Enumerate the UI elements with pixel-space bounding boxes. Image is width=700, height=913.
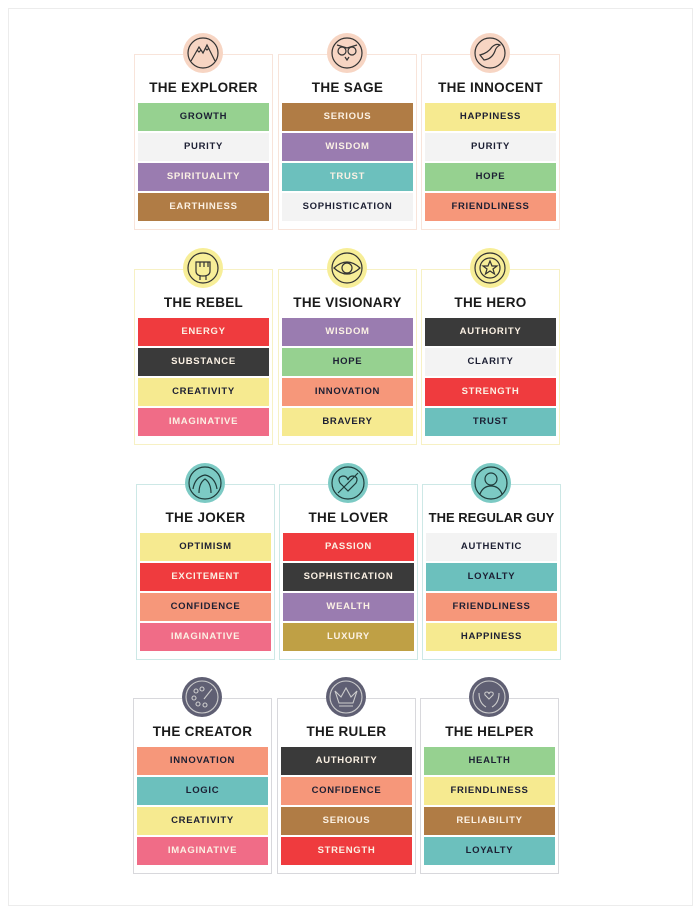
title: THE EXPLORER	[149, 80, 258, 95]
card: the ruler	[277, 698, 416, 874]
trait bars: SUBSTANCE	[171, 356, 236, 367]
title: THE REBEL	[164, 295, 243, 310]
trait bars: SERIOUS	[324, 111, 371, 122]
icon: dove	[470, 33, 510, 73]
trait bars	[140, 533, 271, 651]
trait bars: HOPE	[333, 356, 362, 367]
trait bars: INNOVATION	[315, 386, 380, 397]
trait bars: LOYALTY	[466, 845, 513, 856]
trait bars: IMAGINATIVE	[171, 631, 240, 642]
trait bars	[137, 747, 268, 865]
trait bars: STRENGTH	[462, 386, 519, 397]
trait bars: TRUST	[330, 171, 365, 182]
title: THE LOVER	[309, 510, 388, 525]
trait bars: WISDOM	[325, 141, 370, 152]
card: the hero	[421, 269, 560, 445]
icon: fist	[183, 248, 223, 288]
title: THE REGULAR GUY	[429, 510, 554, 525]
icon: crown	[326, 677, 366, 717]
card: the rebel	[134, 269, 273, 445]
trait bars	[138, 103, 269, 221]
icon: eye	[327, 248, 367, 288]
trait bars: RELIABILITY	[456, 815, 523, 826]
trait bars: BRAVERY	[322, 416, 373, 427]
trait bars	[425, 103, 556, 221]
trait bars: SPIRITUALITY	[167, 171, 240, 182]
trait bars: STRENGTH	[318, 845, 375, 856]
card: the helper	[420, 698, 559, 874]
trait bars: AUTHORITY	[460, 326, 521, 337]
title: THE RULER	[307, 724, 386, 739]
icon: person	[471, 463, 511, 503]
icon: owl	[327, 33, 367, 73]
trait bars	[138, 318, 269, 436]
trait bars: EXCITEMENT	[171, 571, 240, 582]
trait bars: HOPE	[476, 171, 505, 182]
trait bars: LOYALTY	[468, 571, 515, 582]
icon: star badge	[470, 248, 510, 288]
trait bars: CONFIDENCE	[171, 601, 240, 612]
trait bars: LOGIC	[186, 785, 219, 796]
trait bars: PURITY	[184, 141, 223, 152]
trait bars: AUTHENTIC	[461, 541, 522, 552]
title: THE HERO	[454, 295, 527, 310]
icon: palette	[182, 677, 222, 717]
trait bars: CREATIVITY	[172, 386, 235, 397]
trait bars: EARTHINESS	[169, 201, 238, 212]
icon: jester	[185, 463, 225, 503]
card: the regular guy	[422, 484, 561, 660]
card: the explorer	[134, 54, 273, 230]
trait bars: OPTIMISM	[179, 541, 232, 552]
trait bars: WEALTH	[326, 601, 371, 612]
trait bars	[424, 747, 555, 865]
trait bars: LUXURY	[327, 631, 370, 642]
trait bars: AUTHORITY	[316, 755, 377, 766]
trait bars: SOPHISTICATION	[303, 201, 392, 212]
title: THE HELPER	[445, 724, 534, 739]
trait bars	[282, 318, 413, 436]
trait bars: CONFIDENCE	[312, 785, 381, 796]
trait bars: TRUST	[473, 416, 508, 427]
card: the creator	[133, 698, 272, 874]
trait bars	[426, 533, 557, 651]
card: the visionary	[278, 269, 417, 445]
trait bars: HAPPINESS	[461, 631, 522, 642]
trait bars	[282, 103, 413, 221]
trait bars: PASSION	[325, 541, 372, 552]
icon: mountains	[183, 33, 223, 73]
trait bars: IMAGINATIVE	[168, 845, 237, 856]
trait bars: WISDOM	[325, 326, 370, 337]
trait bars: HEALTH	[468, 755, 511, 766]
trait bars: FRIENDLINESS	[451, 201, 530, 212]
trait bars: IMAGINATIVE	[169, 416, 238, 427]
trait bars: ENERGY	[181, 326, 226, 337]
trait bars	[281, 747, 412, 865]
card: the sage	[278, 54, 417, 230]
trait bars: FRIENDLINESS	[450, 785, 529, 796]
card: the innocent	[421, 54, 560, 230]
title: THE CREATOR	[153, 724, 252, 739]
trait bars: SOPHISTICATION	[304, 571, 393, 582]
trait bars: GROWTH	[180, 111, 227, 122]
trait bars: SERIOUS	[323, 815, 370, 826]
title: THE SAGE	[312, 80, 383, 95]
card: the lover	[279, 484, 418, 660]
trait bars: INNOVATION	[170, 755, 235, 766]
trait bars: CLARITY	[467, 356, 514, 367]
trait bars: PURITY	[471, 141, 510, 152]
trait bars	[425, 318, 556, 436]
trait bars	[283, 533, 414, 651]
title: THE JOKER	[166, 510, 245, 525]
icon: heart with arrow	[328, 463, 368, 503]
trait bars: HAPPINESS	[460, 111, 521, 122]
trait bars: CREATIVITY	[171, 815, 234, 826]
title: THE VISIONARY	[293, 295, 402, 310]
title: THE INNOCENT	[438, 80, 543, 95]
trait bars: FRIENDLINESS	[452, 601, 531, 612]
icon: hands with heart	[469, 677, 509, 717]
card: the joker	[136, 484, 275, 660]
